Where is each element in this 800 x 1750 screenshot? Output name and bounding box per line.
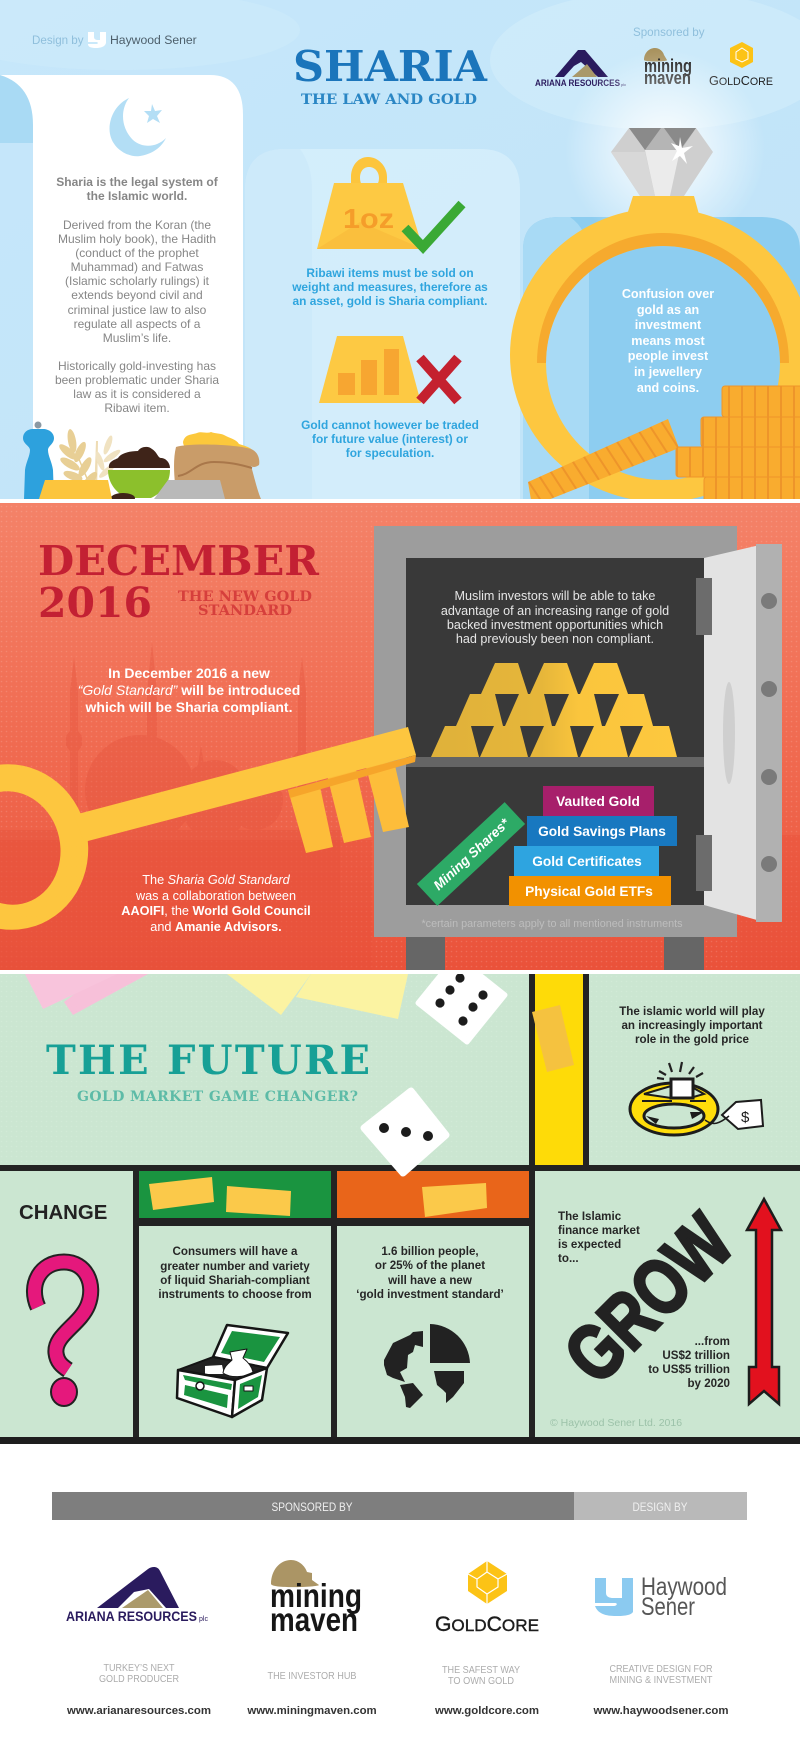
text: consumers: greater number and variety (160, 1260, 310, 1273)
sponsors logos top: mining (644, 56, 692, 76)
icon: golden key (0, 727, 416, 944)
website links (66, 1705, 729, 1717)
label stack: gold instruments (417, 786, 677, 906)
text: growth figures: US$2 trillion (662, 1349, 730, 1362)
icon: pink and yellow cards (25, 974, 408, 1019)
text: growth figures: to US$5 trillion (648, 1363, 730, 1376)
logo: GoldCore: GOLDCORE (435, 1613, 539, 1636)
website links: www.haywoodsener.com (592, 1705, 729, 1717)
title: December 2016: STANDARD (198, 603, 292, 619)
text: Sharia definition: (Islamic scholarly rulings) it (65, 274, 210, 288)
text: consumers (158, 1245, 312, 1301)
logo: Haywood Sener: Haywood (641, 1573, 727, 1601)
text: consumers: Consumers will have a (172, 1245, 298, 1258)
text: vault note: Muslim investors will be able to take (455, 589, 655, 603)
text: collaboration credit: was a collaboration between (135, 889, 296, 903)
icon: gold cards on board (149, 1005, 574, 1217)
icon: mosque silhouette (0, 645, 338, 867)
text: Sharia definition: been problematic under Sharia (55, 373, 219, 387)
text: vault note: backed investment opportunities which (447, 618, 663, 632)
text: growth figures: ...from (695, 1335, 730, 1348)
title: Sharia: THE LAW AND GOLD (301, 92, 477, 108)
text: Sharia definition: Derived from the Koran (the (63, 218, 211, 232)
label stack: gold instruments: Vaulted Gold (556, 794, 640, 809)
text: finance market: is expected (558, 1238, 621, 1251)
sponsors logos top: Sponsored by (633, 26, 705, 39)
icon: question mark (34, 1262, 91, 1406)
panel: The Future section (0, 956, 800, 1444)
text: population: 1.6 billion people, (381, 1245, 479, 1258)
icon: crescent and star (110, 98, 166, 156)
text: finance market (558, 1210, 640, 1265)
credit: design by (32, 32, 197, 48)
icon: ring with price tag: $ (741, 1109, 750, 1126)
text: Sharia definition: Ribawi item. (104, 401, 170, 415)
scroll panel: what is Sharia (0, 75, 243, 499)
text: consumers: instruments to choose from (158, 1288, 312, 1301)
text: jewellery confusion: people invest (628, 349, 709, 363)
logo: GoldCore (435, 1561, 539, 1636)
icon: gold bar pyramid (431, 663, 677, 757)
text: speculation rule: Gold cannot however be traded (301, 418, 479, 432)
text: Islamic world role: The islamic world will play (619, 1005, 765, 1018)
credit: design by: Haywood Sener (110, 33, 197, 47)
text: consumers: of liquid Shariah-compliant (160, 1274, 310, 1287)
text: collaboration credit: AAOIFI, the World Gold Council (121, 904, 311, 918)
title: December 2016: THE NEW GOLD (178, 589, 312, 605)
text: jewellery confusion: Confusion over (622, 287, 714, 301)
icon: red up arrow (747, 1199, 781, 1404)
text: population (356, 1245, 504, 1301)
panel: Sharia introduction section (0, 0, 800, 507)
text: speculation rule: for future value (interest) or (312, 432, 468, 446)
icon: bowl of dates (108, 447, 170, 503)
text: ribawi rule: an asset, gold is Sharia compliant. (293, 294, 487, 308)
text: finance market: finance market (558, 1224, 640, 1237)
header bar: SPONSORED BY (272, 1501, 353, 1514)
text: Sharia definition: regulate all aspects of a (74, 317, 201, 331)
title: The Future (46, 1044, 368, 1101)
title: Sharia (296, 50, 488, 104)
text: finance market: The Islamic (558, 1210, 622, 1223)
text: growth figures (648, 1335, 730, 1390)
icon: silver bar (154, 480, 225, 499)
header bar: DESIGN BY (632, 1501, 688, 1514)
text: Change: CHANGE (19, 1202, 107, 1224)
text: jewellery confusion: gold as an (637, 303, 699, 317)
text: Sharia definition: Muslim’s life. (103, 331, 171, 345)
logo: Haywood Sener: Sener (641, 1593, 695, 1621)
text: copyright: © Haywood Sener Ltd. 2016 (550, 1417, 682, 1429)
text: Sharia definition: criminal justice law to also (68, 303, 207, 317)
website links: www.goldcore.com (434, 1705, 539, 1717)
board squares (0, 974, 800, 1444)
panel: December 2016 section (0, 503, 800, 970)
label stack: gold instruments: Physical Gold ETFs (525, 884, 653, 899)
taglines: TURKEY’S NEXT (104, 1663, 174, 1674)
logo: Haywood Sener (595, 1573, 727, 1621)
text: Sharia definition: Muslim holy book), the Hadith (58, 232, 216, 246)
text: Sharia definition: Historically gold-investing has (58, 359, 216, 373)
label stack: gold instruments: Gold Certificates (532, 854, 642, 869)
logo: Mining Maven (270, 1560, 362, 1638)
icon: globe pie chart (384, 1324, 470, 1408)
icon: dice (364, 956, 505, 1173)
text: jewellery confusion: investment (635, 318, 702, 332)
logo: Ariana Resources: ARIANA RESOURCES (66, 1609, 197, 1624)
text: ribawi rule (291, 266, 488, 308)
website links: www.arianaresources.com (66, 1705, 211, 1717)
icon: coin stacks (528, 386, 800, 507)
sponsors logos top: plc (621, 82, 626, 87)
text: ribawi rule: weight and measures, therefore as (291, 280, 488, 294)
text: growth figures: by 2020 (687, 1377, 730, 1390)
text: Islamic world role (619, 1005, 765, 1046)
icon: gold bar with chart and cross (319, 336, 458, 403)
text: new gold standard intro: “Gold Standard” will be introduced (78, 682, 300, 698)
text: finance market: to... (558, 1252, 579, 1265)
text: speculation rule: for speculation. (346, 446, 434, 460)
text: Sharia definition: the Islamic world. (87, 189, 187, 203)
icon: 1oz weight with tick (317, 157, 462, 249)
text: population: or 25% of the planet (375, 1259, 485, 1272)
text: Islamic world role: role in the gold price (635, 1033, 750, 1046)
credit: design by: Design by (32, 34, 84, 47)
text: Grow: GROW (547, 1197, 750, 1400)
panel: sponsors footer (52, 1492, 747, 1717)
logo: Mining Maven: mining (270, 1577, 362, 1614)
text: collaboration credit: The Sharia Gold Standard (142, 873, 291, 887)
text: Sharia definition: extends beyond civil and (71, 288, 203, 302)
text: collaboration credit (121, 873, 311, 934)
text: jewellery confusion (622, 287, 714, 395)
icon: diamond ring (510, 128, 800, 502)
text: population: ‘gold investment standard’ (356, 1288, 504, 1301)
title: Sharia: SHARIA (293, 42, 488, 92)
logo: Ariana Resources (66, 1567, 208, 1624)
text: new gold standard intro (78, 665, 300, 715)
taglines (99, 1663, 712, 1687)
icon: wheat (59, 429, 120, 480)
logo: Mining Maven: maven (270, 1601, 358, 1638)
text: jewellery confusion: in jewellery (634, 365, 702, 379)
text: Sharia definition: law as it is considered a (73, 387, 201, 401)
text: vault note: had previously been non compliant. (456, 632, 654, 646)
text: vault note (441, 589, 669, 646)
logo: Ariana Resources: plc (199, 1616, 208, 1623)
text: Islamic world role: an increasingly important (621, 1019, 763, 1032)
text: Sharia definition: (conduct of the prophet (75, 246, 199, 260)
text: collaboration credit: and Amanie Advisors. (150, 920, 282, 934)
text: new gold standard intro: which will be Sharia compliant. (85, 699, 292, 715)
icon: ribawi items still life (23, 422, 261, 503)
sponsors logos top (535, 26, 773, 88)
title: The Future: GOLD MARKET GAME CHANGER? (77, 1089, 358, 1105)
website links: www.miningmaven.com (246, 1705, 377, 1717)
icon: gold bar (39, 480, 112, 499)
text: vault note: advantage of an increasing range of gold (441, 604, 669, 618)
text: footnote: *certain parameters apply to all mentioned instruments (421, 918, 683, 930)
label stack: gold instruments: Gold Savings Plans (538, 824, 666, 839)
sponsors logos top: GOLDCORE (709, 73, 773, 88)
taglines: THE SAFEST WAY (442, 1665, 520, 1676)
header bar (52, 1492, 747, 1520)
text: Sharia definition: Muhammad) and Fatwas (71, 260, 203, 274)
icon: open vault door (696, 544, 782, 922)
text: new gold standard intro: In December 2016 a new (108, 665, 270, 681)
taglines: TO OWN GOLD (448, 1676, 514, 1687)
taglines: CREATIVE DESIGN FOR (610, 1664, 712, 1675)
title: The Future: THE FUTURE (46, 1037, 370, 1084)
taglines: THE INVESTOR HUB (268, 1671, 357, 1682)
panel: jewellery and coins (510, 50, 800, 507)
taglines: GOLD PRODUCER (99, 1674, 179, 1685)
text: Sharia definition: Sharia is the legal system of (56, 175, 219, 189)
title: December 2016: DECEMBER (38, 537, 320, 585)
panel: vault (374, 526, 782, 970)
icon: pepper mill (23, 422, 54, 499)
text: ribawi rule: Ribawi items must be sold on (306, 266, 474, 280)
text: jewellery confusion: means most (631, 334, 706, 348)
icon: sack of gold (174, 432, 261, 499)
text: jewellery confusion: and coins. (637, 381, 699, 395)
sponsors logos top: ARIANA RESOURCES (535, 78, 620, 88)
text: Sharia definition (55, 175, 219, 415)
icon: treasure chest (177, 1325, 288, 1417)
panel: gold compliance (245, 149, 520, 499)
text: speculation rule (301, 418, 479, 460)
text: population: will have a new (387, 1274, 473, 1287)
taglines: MINING & INVESTMENT (610, 1675, 712, 1686)
label stack: gold instruments: Mining Shares* (431, 815, 513, 893)
sponsors logos top: maven (644, 68, 691, 88)
title: December 2016: 2016 (38, 579, 152, 627)
icon: ring with price tag (630, 1062, 763, 1135)
title: December 2016 (40, 544, 320, 618)
icon: 1oz weight with tick: 1oz (343, 203, 394, 234)
